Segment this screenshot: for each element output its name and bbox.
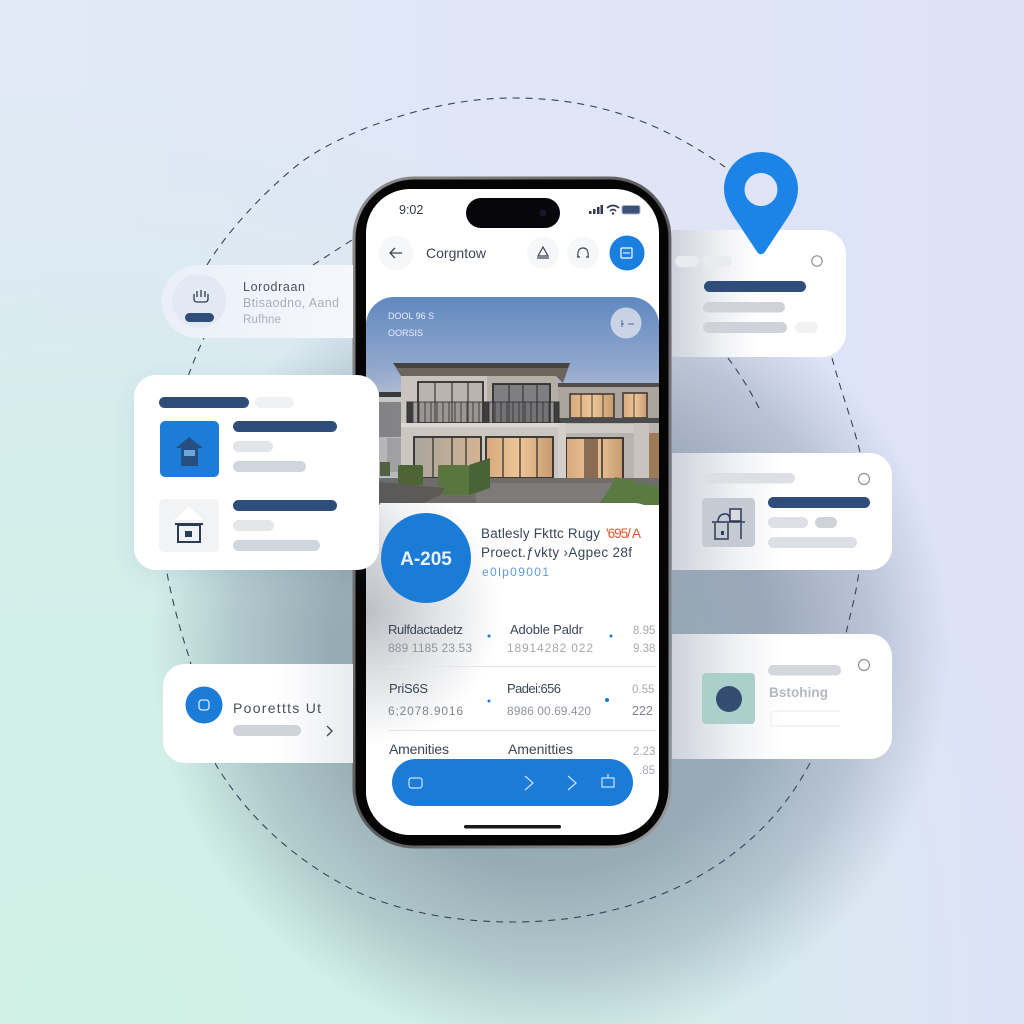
row 2: 8986 00.69.420 xyxy=(507,704,591,718)
row 3 xyxy=(389,741,655,777)
status time: 9:02 xyxy=(399,203,423,217)
nav: icon button 2 xyxy=(567,237,599,269)
row 2: 6;2078.9016 xyxy=(388,704,463,718)
phone xyxy=(354,178,670,847)
profile text xyxy=(243,280,339,326)
card: location xyxy=(672,230,846,357)
status ring xyxy=(858,660,870,670)
row 1: Adoble Paldr xyxy=(510,622,584,637)
photo caption: DOOL 96 S xyxy=(388,311,434,321)
ground storey xyxy=(401,423,659,483)
row 1 xyxy=(388,622,655,655)
row 2: 222 xyxy=(632,704,653,718)
row 3: Amenitties xyxy=(508,741,573,757)
property title xyxy=(481,526,641,560)
row 1: Rulfdactadetz xyxy=(388,622,463,637)
icon: teal tile xyxy=(702,673,755,724)
status icons xyxy=(589,205,640,215)
nav title: Corgntow xyxy=(426,245,487,261)
nav: active button xyxy=(610,236,644,270)
photo caption xyxy=(388,311,434,338)
row 3: 2.23 xyxy=(633,746,655,758)
row 1: 8.95 xyxy=(633,625,655,637)
property title: Proect.ƒvkty ›Agpec 28f xyxy=(481,545,632,560)
phone body xyxy=(354,178,670,847)
search label: Poorettts Ut xyxy=(233,700,321,716)
card header bars xyxy=(159,397,294,408)
right wing xyxy=(558,383,659,423)
profile text: Btisaodno, Aand xyxy=(243,296,339,310)
search icon xyxy=(186,686,222,724)
header bar xyxy=(703,473,795,484)
row 2 xyxy=(388,681,654,718)
row 3: .85 xyxy=(639,765,655,777)
profile text: Rufhne xyxy=(243,314,281,326)
listing 1 bars xyxy=(233,421,337,472)
neighbouring wing xyxy=(379,392,403,477)
booking label: Bstohing xyxy=(769,685,828,700)
card: listings xyxy=(134,375,379,570)
card: booking xyxy=(672,634,892,759)
row 1: 889 1185 23.53 xyxy=(388,641,472,655)
row 2: Padei:656 xyxy=(507,681,561,696)
location bars xyxy=(703,281,818,333)
furniture bars xyxy=(768,497,870,548)
row 2: 0.55 xyxy=(632,684,654,696)
chevron xyxy=(327,726,332,736)
search bar xyxy=(233,725,301,736)
home indicator xyxy=(464,825,561,828)
nav: back button xyxy=(379,236,413,270)
icon: desk tile xyxy=(702,498,755,547)
booking field xyxy=(771,711,840,726)
card: furniture xyxy=(672,453,892,570)
dynamic island xyxy=(466,198,560,228)
faint header bars xyxy=(675,256,732,267)
property info sheet xyxy=(366,503,659,835)
unit badge xyxy=(381,513,471,603)
row 1: 9.38 xyxy=(633,643,655,655)
icon: map pin xyxy=(724,152,798,254)
ground and hedges xyxy=(379,458,659,505)
property title: Batlesly Fkttc Rugy xyxy=(481,526,600,541)
dashed orbit ring xyxy=(164,98,863,922)
upper storey xyxy=(393,363,570,427)
photo badge xyxy=(610,308,642,338)
balcony xyxy=(407,402,559,423)
card: search xyxy=(163,664,353,763)
bottom action bar xyxy=(392,759,633,806)
avatar xyxy=(172,274,226,328)
row 2: PriS6S xyxy=(389,681,428,696)
booking header bar xyxy=(768,665,841,676)
property code: e0lp09001 xyxy=(482,565,549,579)
property title: '695/ A xyxy=(606,526,641,541)
profile text: Lorodraan xyxy=(243,280,305,294)
row 3: Amenities xyxy=(389,741,449,757)
card: profile pill xyxy=(162,265,353,338)
status ring xyxy=(812,256,822,266)
status ring xyxy=(858,474,870,484)
icon: blue house tile xyxy=(160,421,219,477)
unit badge: A-205 xyxy=(400,549,452,570)
property photo xyxy=(366,297,659,505)
row 1: 18914282 022 xyxy=(507,641,593,655)
listing 2 bars xyxy=(233,500,337,551)
icon: grey house tile xyxy=(159,499,219,552)
nav: icon button 1 xyxy=(527,237,559,269)
photo caption: OORSIS xyxy=(388,328,423,338)
house illustration xyxy=(379,363,659,505)
phone screen xyxy=(366,189,659,835)
